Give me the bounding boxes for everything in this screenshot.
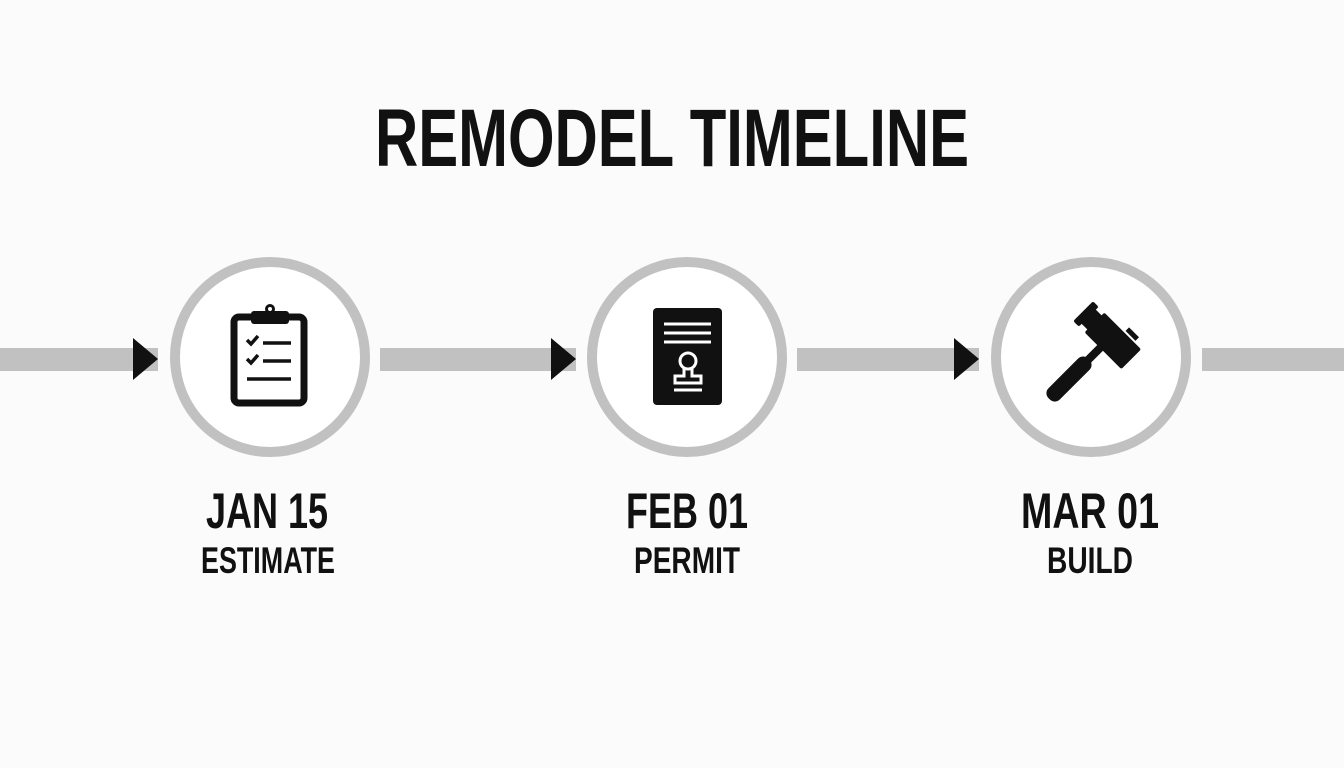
- circle 1: [175, 262, 365, 452]
- circle 3: [996, 262, 1186, 452]
- date 2: FEB 01: [626, 483, 748, 539]
- step 3: build: [996, 262, 1186, 581]
- title: REMODEL TIMELINE: [375, 93, 969, 184]
- date 1: JAN 15: [206, 483, 328, 539]
- icon: clipboard: [234, 304, 304, 403]
- step 2: permit: [592, 262, 782, 581]
- arrow 2: [551, 338, 576, 380]
- circle 2: [592, 262, 782, 452]
- date 3: MAR 01: [1021, 483, 1159, 539]
- label 1: ESTIMATE: [201, 540, 335, 581]
- step 1: estimate: [175, 262, 365, 581]
- icon: hammer: [1022, 296, 1146, 420]
- arrow 3: [954, 338, 979, 380]
- label 3: BUILD: [1047, 540, 1133, 581]
- arrow 1: [133, 338, 158, 380]
- timeline bar segments: [0, 348, 1344, 371]
- label 2: PERMIT: [634, 540, 740, 581]
- icon: permit document with stamp: [653, 308, 722, 405]
